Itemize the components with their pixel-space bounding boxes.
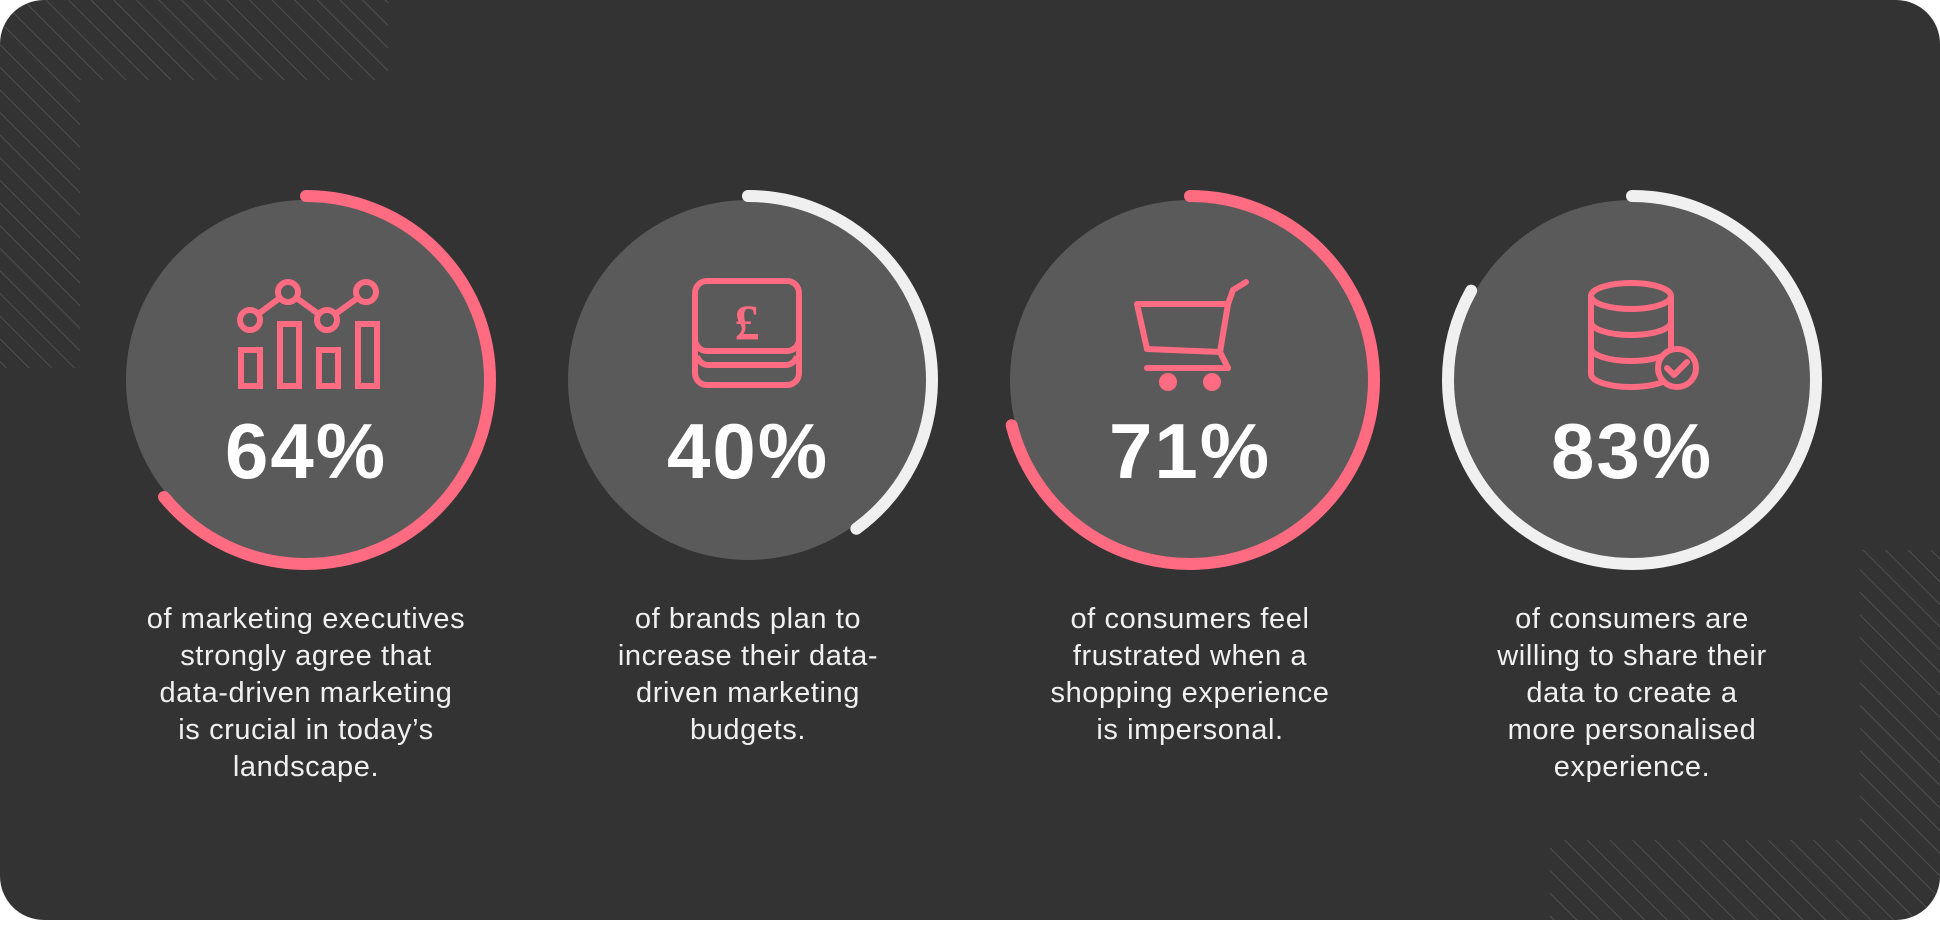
description: budgets.: [690, 714, 806, 746]
stat 2: 40%: [564, 196, 932, 746]
percentage: 40%: [667, 407, 829, 495]
percentage: 64%: [225, 407, 387, 495]
description: increase their data-: [618, 640, 878, 672]
description: landscape.: [233, 751, 379, 783]
description: experience.: [1554, 751, 1710, 783]
description: driven marketing: [636, 677, 860, 709]
description: shopping experience: [1050, 677, 1330, 709]
description: of marketing executives: [147, 603, 465, 635]
progress arc 64%: [122, 196, 490, 564]
description: is impersonal.: [1096, 714, 1284, 746]
description: data-driven marketing: [159, 677, 453, 709]
description: of brands plan to: [635, 603, 861, 635]
percentage: 71%: [1109, 407, 1271, 495]
description: of consumers are: [1515, 603, 1749, 635]
stat 1: 64%: [122, 196, 490, 783]
icon: shopping cart: [1137, 282, 1246, 388]
icon: bar chart: [240, 282, 377, 386]
percentage: 83%: [1551, 407, 1713, 495]
description: willing to share their: [1496, 640, 1767, 672]
description: strongly agree that: [180, 640, 432, 672]
description: of consumers feel: [1070, 603, 1310, 635]
description: data to create a: [1526, 677, 1738, 709]
description: more personalised: [1508, 714, 1756, 746]
stat 4: 83%: [1448, 196, 1816, 783]
progress arc 40%: [564, 196, 932, 564]
progress arc 83%: [1448, 196, 1816, 564]
stat 3: 71%: [1006, 196, 1374, 746]
icon: pound notes: [695, 281, 799, 385]
description: frustrated when a: [1073, 640, 1307, 672]
description: is crucial in today’s: [178, 714, 434, 746]
progress arc 71%: [1006, 196, 1374, 564]
icon: database check: [1591, 283, 1696, 387]
icon: pound notes: £: [734, 294, 760, 350]
